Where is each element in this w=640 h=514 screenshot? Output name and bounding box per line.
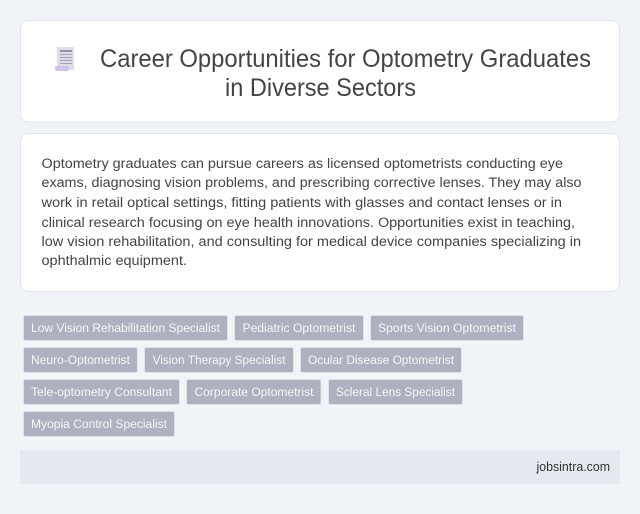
tag: Sports Vision Optometrist: Sports Vision Optometrist bbox=[378, 321, 517, 335]
description text: Optometry graduates can pursue careers as licensed optometrists conducting eye bbox=[42, 156, 563, 172]
description text: ophthalmic equipment. bbox=[42, 253, 187, 269]
tag: Neuro-Optometrist bbox=[24, 348, 138, 372]
title: in Diverse Sectors bbox=[225, 74, 416, 102]
description text: exams, diagnosing vision problems, and prescribing corrective lenses. They may also bbox=[42, 175, 582, 191]
tag: Tele-optometry Consultant bbox=[24, 380, 180, 404]
tag: Pediatric Optometrist: Pediatric Optometrist bbox=[242, 321, 356, 335]
tag: Ocular Disease Optometrist bbox=[300, 348, 462, 372]
tag: Pediatric Optometrist bbox=[234, 316, 364, 340]
description text: work in retail optical settings, fitting patients with glasses and contact lenses or in bbox=[40, 195, 562, 211]
title: Career Opportunities for Optometry Graduates bbox=[100, 45, 591, 73]
tag list bbox=[24, 316, 524, 436]
description text: clinical research focusing on eye health innovations. Opportunities exist in teaching, bbox=[42, 215, 575, 231]
panel: title card bbox=[20, 20, 620, 122]
tag: Low Vision Rehabilitation Specialist bbox=[24, 316, 228, 340]
description text bbox=[40, 156, 582, 269]
footer source: jobsintra.com bbox=[536, 460, 610, 474]
tag: Sports Vision Optometrist bbox=[370, 316, 524, 340]
tag: Myopia Control Specialist: Myopia Control Specialist bbox=[31, 417, 168, 431]
tag: Low Vision Rehabilitation Specialist: Low Vision Rehabilitation Specialist bbox=[31, 321, 221, 335]
tag: Scleral Lens Specialist: Scleral Lens Specialist bbox=[336, 385, 456, 399]
icon: document scroll bbox=[55, 47, 74, 71]
description text: low vision rehabilitation, and consulting for medical device companies specializing in bbox=[42, 234, 581, 250]
footer bar bbox=[20, 450, 620, 484]
tag: Neuro-Optometrist: Neuro-Optometrist bbox=[31, 353, 131, 367]
tag: Vision Therapy Specialist: Vision Therapy Specialist bbox=[152, 353, 286, 367]
tag: Scleral Lens Specialist bbox=[328, 380, 462, 404]
panel: description card bbox=[20, 134, 620, 292]
tag: Corporate Optometrist: Corporate Optometrist bbox=[194, 385, 314, 399]
tag: Ocular Disease Optometrist: Ocular Disease Optometrist bbox=[308, 353, 455, 367]
tag: Corporate Optometrist bbox=[186, 380, 321, 404]
tag: Myopia Control Specialist bbox=[24, 412, 174, 436]
title bbox=[100, 45, 591, 102]
tag: Tele-optometry Consultant: Tele-optometry Consultant bbox=[31, 385, 173, 399]
tag: Vision Therapy Specialist bbox=[144, 348, 294, 372]
